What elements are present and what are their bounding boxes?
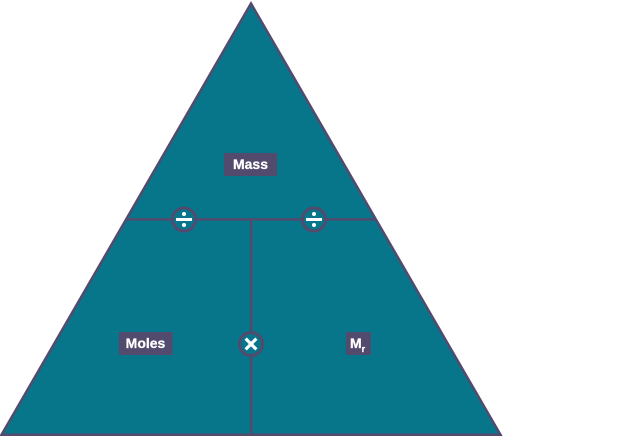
- label: Mass: [224, 153, 277, 176]
- icon: multiply symbol: [240, 332, 262, 356]
- icon: right divide symbol: [302, 208, 326, 231]
- triangle background: [2, 4, 500, 435]
- label: Moles: [119, 332, 172, 355]
- label: Mass: Mass: [233, 156, 268, 172]
- label: Mr: r: [362, 344, 366, 354]
- label: Mr: M: [350, 335, 362, 351]
- icon: left divide symbol: [172, 208, 196, 231]
- label: Moles: Moles: [126, 335, 166, 351]
- label: Mr: [346, 332, 371, 355]
